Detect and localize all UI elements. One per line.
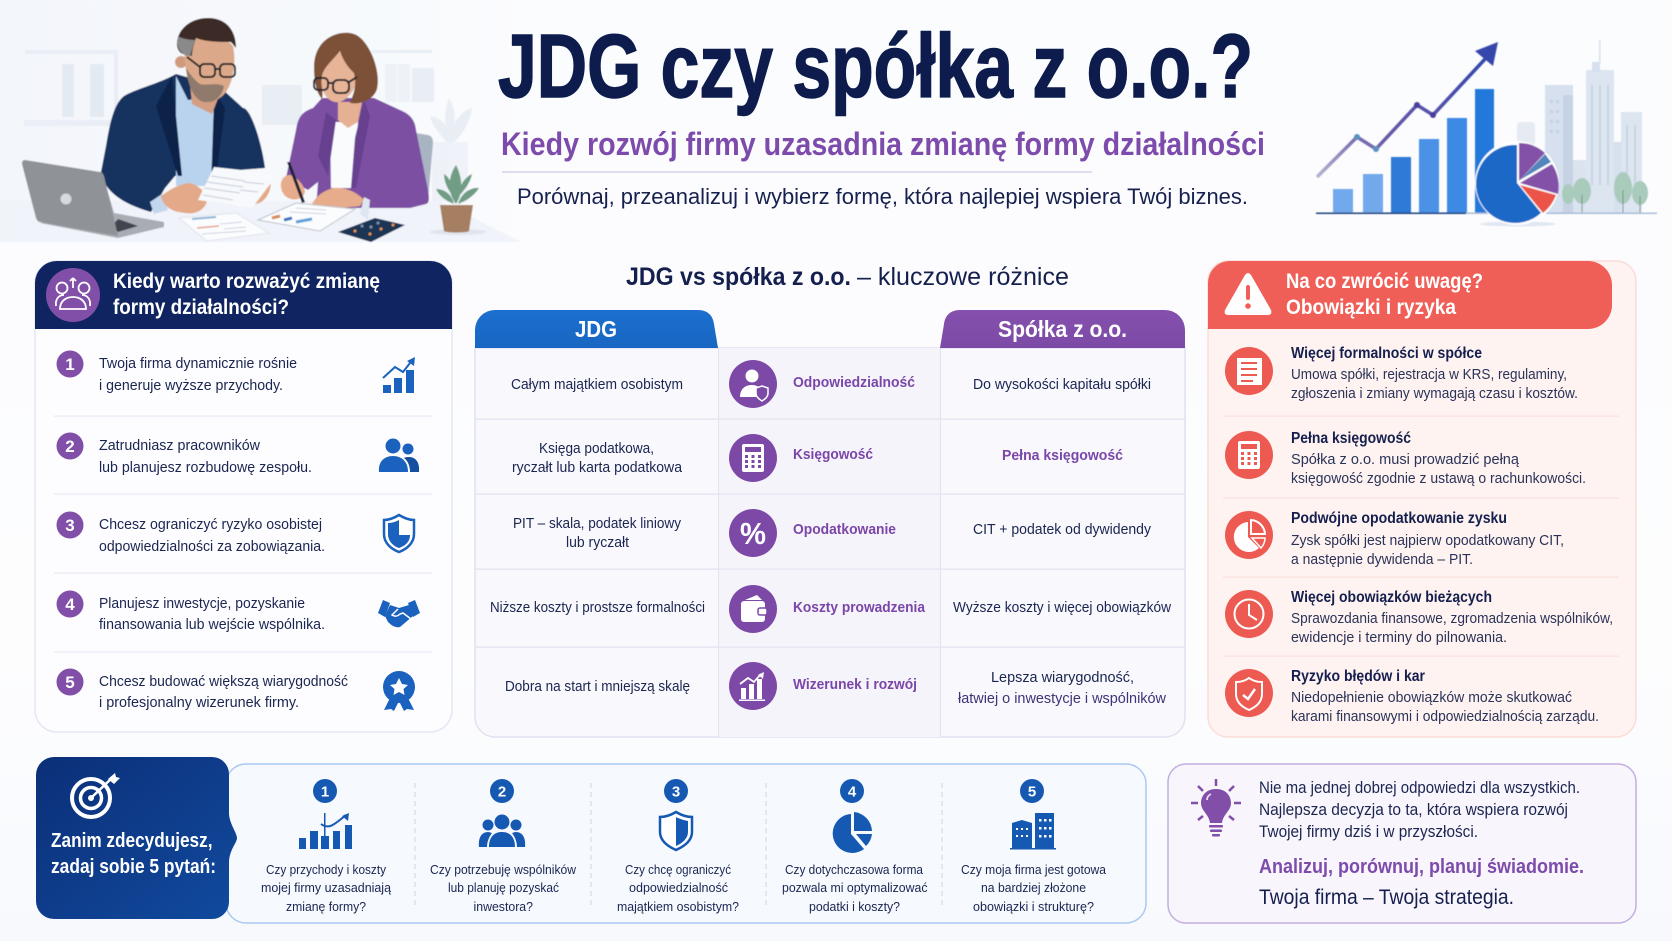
illustration: man and woman reviewing documents at a desk [0,0,521,246]
question 4: Czy dotychczasowa forma [785,862,924,877]
risk: ongoing duties: ewidencje i terminy do pilnowania. [1291,630,1507,646]
risk: formalities: zgłoszenia i zmiany wymagają czasu i kosztów. [1291,386,1578,402]
heading: Obowiązki i ryzyka [1286,296,1456,319]
question 4: pozwala mi optymalizować [782,880,928,895]
row: accounting: Księgowość [793,446,873,463]
row: accounting [512,434,1123,482]
callout: closing advice: Twojej firmy dziś i w przyszłości. [1259,823,1478,841]
callout: closing advice: Najlepsza decyzja to ta, która wspiera rozwój [1259,801,1568,819]
icon: shield [660,812,692,850]
comparison heading: – kluczowe różnice [857,263,1069,291]
question 1: zmianę formy? [286,899,366,914]
comparison table [475,310,1185,737]
risk: full accounting: Pełna księgowość [1291,430,1411,447]
question 5: 5 [1028,784,1036,800]
panel header [1208,261,1612,329]
column header: Spółka z o.o.: Spółka z o.o. [998,316,1127,342]
item 3: Chcesz ograniczyć ryzyko osobistej [99,516,322,533]
column header: Spółka z o.o. [940,310,1185,348]
icon: team [379,438,419,472]
question 5: na bardziej złożone [981,880,1086,895]
icon: calculator [1225,431,1273,479]
column header: JDG: JDG [575,316,617,342]
heading: Na co zwrócić uwagę? [1286,270,1483,293]
heading [1286,270,1483,319]
question 3: odpowiedzialność [629,880,728,895]
icon: percent [729,509,777,557]
icon: wallet [729,585,777,633]
panel: when to consider change [35,261,452,732]
item 2: Zatrudniasz pracowników [99,437,260,454]
comparison heading [626,263,1069,291]
item 1: Twoja firma dynamicznie rośnie [99,355,297,372]
risk: double taxation [1225,510,1564,568]
question 3: 3 [672,784,680,800]
item 1: i generuje wyższe przychody. [99,377,283,394]
risk: formalities: Umowa spółki, rejestracja w KRS, regulaminy, [1291,367,1567,383]
heading: formy działalności? [113,296,289,319]
row: accounting: Księga podatkowa, [539,441,654,457]
question 3: Czy chcę ograniczyć [625,862,731,877]
icon: handshake [378,600,420,627]
risk: formalities: Więcej formalności w spółce [1291,345,1482,362]
question 2: lub planuję pozyskać [448,880,559,895]
item 5: Chcesz budować większą wiarygodność [99,673,348,690]
item 1: 1 [65,355,75,374]
item 2 [56,432,419,476]
row: liability: Odpowiedzialność [793,374,915,391]
question 1 [261,779,392,914]
risk: formalities [1225,345,1578,402]
icon: target with arrow [72,773,120,817]
item 4 [56,590,420,633]
desk [0,201,521,242]
icon: clock [1225,590,1273,638]
chair [410,132,433,201]
row: taxation: CIT + podatek od dywidendy [973,522,1152,538]
question 2 [430,779,577,914]
question 3: majątkiem osobistym? [617,899,739,914]
row: accounting: Pełna księgowość [1002,447,1123,464]
icon: team of three [479,814,525,847]
question 2: inwestora? [474,899,533,914]
row: running costs: Koszty prowadzenia [793,599,926,616]
subtitle: Kiedy rozwój firmy uzasadnia zmianę formy działalności [501,126,1265,162]
icon: office buildings [1010,813,1056,850]
panel: five questions [226,764,1146,923]
column header: JDG [475,310,718,348]
question 1: 1 [321,784,329,800]
icon: light bulb [1191,779,1241,836]
icon: award badge [383,671,415,711]
callout: closing advice: Nie ma jednej dobrej odpowiedzi dla wszystkich. [1259,779,1580,797]
question 4 [782,779,928,914]
illustration: growth chart, pie chart and skyline [1316,40,1657,226]
callout: closing advice: Twoja firma – Twoja strategia. [1259,886,1514,909]
question 1: Czy przychody i koszty [266,862,386,877]
icon: growth chart [729,662,777,710]
row: image and growth: Lepsza wiarygodność, [991,670,1134,686]
woman [281,33,429,220]
calculator [338,218,405,242]
item 4: Planujesz inwestycje, pozyskanie [99,595,305,612]
row: taxation: lub ryczałt [566,535,629,551]
question 4: 4 [848,784,857,800]
row: image and growth: łatwiej o inwestycje i wspólników [958,691,1167,707]
item 5: i profesjonalny wizerunek firmy. [99,694,299,711]
item 2: lub planujesz rozbudowę zespołu. [99,459,312,476]
item 3: odpowiedzialności za zobowiązania. [99,538,325,555]
laptop [40,172,164,238]
question 5 [961,779,1107,914]
callout: before you decide: zadaj sobie 5 pytań: [51,856,216,878]
callout: closing advice [1168,764,1636,923]
man [101,18,271,214]
row: accounting: ryczałt lub karta podatkowa [512,460,683,476]
risk: double taxation: Zysk spółki jest najpierw opodatkowany CIT, [1291,533,1564,549]
question 3 [617,779,739,914]
panel: obligations and risks [1208,261,1636,737]
heading: Kiedy warto rozważyć zmianę [113,270,380,293]
row: taxation: PIT – skala, podatek liniowy [513,516,682,532]
icon: pie chart [833,812,872,853]
risk: ongoing duties: Więcej obowiązków bieżących [1291,589,1492,606]
item 5 [56,668,415,711]
row: liability: Do wysokości kapitału spółki [973,377,1151,393]
row: running costs: Niższe koszty i prostsze formalności [490,600,705,616]
row: image and growth: Wizerunek i rozwój [793,676,917,693]
question 4: podatki i koszty? [809,899,900,914]
comparison heading: JDG vs spółka z o.o. [626,263,851,291]
risk: errors and penalties: Ryzyko błędów i kar [1291,668,1425,685]
risk: double taxation: a następnie dywidenda – PIT. [1291,552,1473,568]
risk: errors and penalties [1225,668,1599,725]
item 1 [56,350,415,394]
row: liability: Całym majątkiem osobistym [511,377,683,393]
risk: errors and penalties: karami finansowymi i odpowiedzialnością zarządu. [1291,709,1599,725]
icon: warning triangle [1225,273,1271,315]
heading [113,270,380,319]
item 5: 5 [65,673,75,692]
callout: closing advice: Analizuj, porównuj, planuj świadomie. [1259,856,1584,878]
row: running costs: Wyższe koszty i więcej obowiązków [953,600,1171,616]
icon: person with shield [729,360,777,408]
risk: full accounting: księgowość zgodnie z ustawą o rachunkowości. [1291,471,1586,487]
icon: calculator [729,434,777,482]
title: JDG czy spółka z o.o.? [498,17,1253,117]
risk: errors and penalties: Niedopełnienie obowiązków może skutkować [1291,690,1572,706]
icon: pie chart [1225,511,1273,559]
row: taxation [513,509,1152,557]
icon: people group [46,268,100,322]
icon: shield [384,515,414,552]
row: taxation: Opodatkowanie [793,521,896,538]
callout: before you decide: Zanim zdecydujesz, [51,830,212,852]
question 2: Czy potrzebuję wspólników [430,862,577,877]
document held [198,167,278,208]
risk: full accounting [1225,430,1586,487]
question 2: 2 [498,784,506,800]
row: running costs [490,585,1171,633]
icon: shield with check [1225,669,1273,717]
row: liability [511,360,1151,408]
callout: before you decide [36,757,237,919]
row: image and growth: Dobra na start i mniejszą skalę [505,679,690,695]
item 4: 4 [65,595,75,614]
risk: double taxation: Podwójne opodatkowanie zysku [1291,510,1507,527]
risk: full accounting: Spółka z o.o. musi prowadzić pełną [1291,452,1520,468]
item 4: finansowania lub wejście wspólnika. [99,616,325,633]
icon: chart with arrow [299,813,352,849]
papers on desk [179,213,269,241]
tagline: Porównaj, przeanalizuj i wybierz formę, która najlepiej wspiera Twój biznes. [517,184,1248,209]
icon: percent: % [740,516,766,551]
question 5: Czy moja firma jest gotowa [961,862,1107,877]
icon: growth bars [383,357,415,393]
panel header [35,261,452,329]
plant [430,229,486,235]
icon: checklist document [1225,347,1273,395]
risk: ongoing duties: Sprawozdania finansowe, zgromadzenia wspólników, [1291,611,1613,627]
risk: ongoing duties [1225,589,1613,646]
question 1: mojej firmy uzasadniają [261,880,392,895]
item 3: 3 [65,516,75,535]
item 2: 2 [65,437,75,456]
item 3 [56,512,414,555]
question 5: obowiązki i strukturę? [973,899,1094,914]
row: image and growth [505,662,1167,710]
